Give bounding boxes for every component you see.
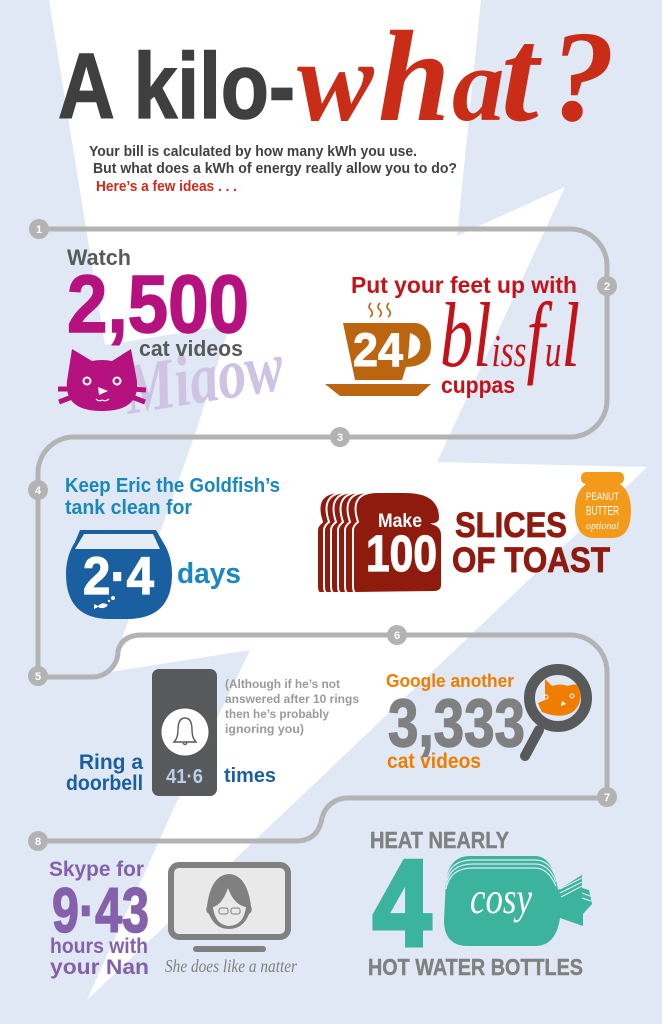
icon: doorbell: 41·6 [166,766,203,788]
icon: tea cup [325,303,431,396]
icon: fish bowl: 2·4 [83,547,154,606]
panel: toast [317,472,631,593]
icon: magnifier with cat [525,670,586,756]
icon: peanut butter jar: PEANUT [586,491,619,503]
panel: skype: Skype for [49,858,144,881]
title: A kilo- [58,34,295,138]
panel: doorbell [66,669,359,796]
panel: skype: your Nan [50,956,149,979]
step number 1: 1 [36,224,42,236]
step number 4 [28,480,48,500]
panel: doorbell: doorbell [66,772,143,795]
panel: cuppas: cuppas [441,372,515,398]
panel: hot water bottles [368,827,592,980]
step number 6 [387,625,407,645]
panel: google: Google another [386,670,514,691]
intro text: Here’s a few ideas . . . [96,178,237,195]
step number 8 [28,831,48,851]
panel: skype: hours with [50,935,148,958]
icon: bread stack: Make [378,511,422,532]
step number 3 [330,427,350,447]
panel: skype [49,858,298,979]
doorbell note: ignoring you) [225,724,304,736]
icon: doorbell [152,669,217,796]
step number 3: 3 [337,432,343,444]
title: h [378,5,450,149]
step number 4: 4 [35,485,42,497]
intro text: Your bill is calculated by how many kWh you use. [89,143,417,160]
panel: toast: OF TOAST [452,541,610,580]
title: t [501,1,542,150]
title: ? [550,5,615,149]
icon: cat [58,349,146,411]
panel: skype: 9·43 [52,876,149,946]
energy path connector [28,219,617,851]
step number 1 [29,219,49,239]
step number 6: 6 [394,630,400,642]
panel: cat videos: Watch [67,245,131,270]
panel: cat videos [58,245,289,430]
step number 2: 2 [604,281,610,293]
panel: goldfish: tank clean for [65,497,192,519]
panel: google [386,670,586,773]
panel: goldfish: days [177,558,241,590]
doorbell note: then he’s probably [225,709,330,721]
panel: toast: SLICES [455,506,567,545]
icon: monitor with nan [171,865,288,952]
panel: cuppas: Put your feet up with [351,272,577,298]
panel: hot water bottles: HEAT NEARLY [370,827,509,853]
intro text [89,143,457,195]
icon: fish bowl [66,530,172,619]
panel: cuppas [325,272,580,398]
panel: goldfish: Keep Eric the Goldfish’s [65,475,280,497]
panel: cat videos: 2,500 [67,259,249,350]
panel: doorbell: Ring a [79,751,143,774]
intro text: But what does a kWh of energy really allow you to do? [93,160,457,177]
step number 8: 8 [35,836,41,848]
step number 7 [597,787,617,807]
panel: hot water bottles: 4 [373,835,431,971]
title: w [297,18,375,145]
doorbell note: (Although if he’s not [225,679,340,691]
icon: hot water bottle [444,856,592,946]
panel: cuppas: blissful [440,286,580,387]
icon: peanut butter jar: optional [586,520,619,532]
panel: cat videos: cat videos [139,336,243,361]
icon: bread stack: 100 [366,525,437,582]
panel: doorbell: times [224,765,276,787]
panel: google: 3,333 [388,685,525,761]
step number 5: 5 [35,671,41,683]
doorbell note [225,679,359,736]
icon: peanut butter jar: BUTTER [586,503,619,518]
step number 7: 7 [604,792,610,804]
icon: hot water bottle: cosy [470,874,532,923]
step number 5 [28,666,48,686]
panel: google: cat videos [387,750,481,773]
doorbell note: answered after 10 rings [225,694,359,706]
panel: hot water bottles: HOT WATER BOTTLES [368,954,583,980]
title: a [452,26,504,143]
panel: skype: She does like a natter [165,956,298,976]
icon: peanut butter jar [575,472,631,538]
title [58,1,615,150]
icon: bread stack [317,492,442,593]
panel: goldfish [65,475,280,619]
icon: tea cup: 24 [353,323,403,376]
panel: cat videos: Miaow [117,326,289,430]
step number 2 [597,276,617,296]
